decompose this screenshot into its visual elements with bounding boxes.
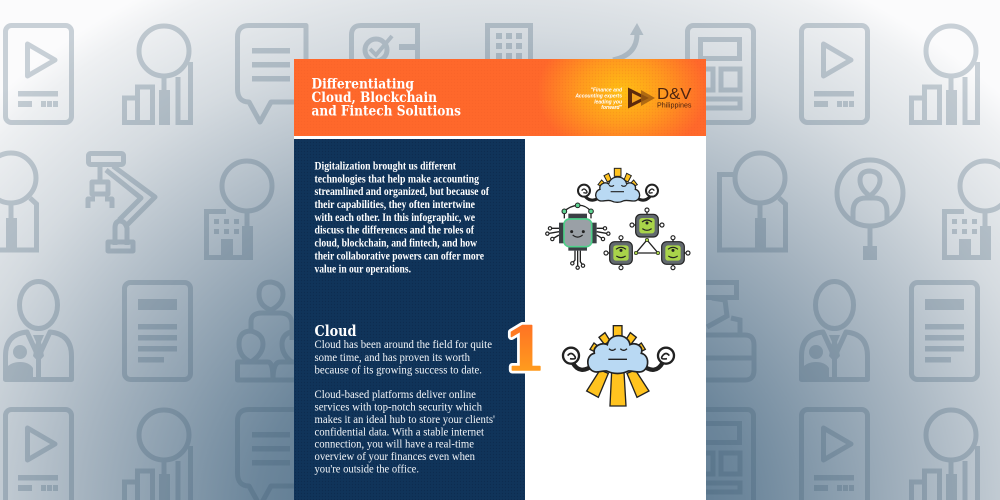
icon: group of people bbox=[238, 282, 296, 380]
tagline bbox=[574, 88, 623, 111]
logo wordmark: Philippines bbox=[657, 100, 692, 110]
heading: Cloud: Cloud bbox=[314, 323, 356, 340]
illustration: large meditating cloud bbox=[563, 326, 674, 406]
icon: play document bbox=[802, 410, 868, 500]
icon: speech bubble bbox=[238, 26, 306, 122]
hands bbox=[563, 348, 674, 364]
panel: orange header bbox=[294, 59, 706, 136]
white poster sheet bbox=[294, 59, 706, 500]
cloud description: because of its growing success to date. bbox=[314, 364, 482, 376]
blockchain node circles bbox=[604, 208, 690, 270]
logo mark bbox=[628, 88, 655, 108]
chip body bbox=[559, 214, 597, 251]
icon: document bbox=[124, 282, 190, 380]
icon: magnifier chart bbox=[912, 410, 978, 500]
cloud description: Cloud has been around the field for quite bbox=[314, 339, 492, 351]
cloud description: confidential data. With a stable internet bbox=[314, 426, 485, 438]
icon: magnifier chart bbox=[912, 26, 978, 125]
icon: check document bbox=[352, 26, 418, 62]
icon: office building bbox=[485, 23, 533, 60]
title: Cloud, Blockchain bbox=[312, 90, 437, 106]
icon: magnifier document left bbox=[0, 153, 36, 251]
icon: robot arm bbox=[88, 154, 155, 251]
icon: magnifier building bbox=[206, 161, 272, 260]
intro paragraph: discuss the differences and the roles of bbox=[314, 225, 474, 237]
small cloud body bbox=[596, 177, 640, 202]
cloud face bbox=[608, 349, 627, 359]
small cloud rays bbox=[598, 168, 637, 187]
icon: person magnifier bbox=[837, 160, 903, 260]
chip connector lines bbox=[547, 205, 608, 268]
illustration: meditating cloud with chip and blockchain bbox=[546, 168, 690, 270]
cloud description: Cloud-based platforms deliver online bbox=[314, 389, 476, 401]
cloud description: makes it an ideal hub to store your clients' bbox=[314, 414, 495, 426]
icon: businessperson bbox=[6, 282, 72, 382]
intro paragraph: streamlined and organized, but because of bbox=[314, 186, 489, 198]
icon: play document bbox=[802, 26, 868, 122]
blockchain block left bbox=[610, 242, 632, 264]
blockchain triangle nodes bbox=[634, 238, 660, 255]
icon: form document bbox=[688, 410, 754, 500]
icon: magnifier chart bbox=[124, 410, 190, 500]
intro paragraph: technologies that help make accounting bbox=[314, 173, 479, 185]
small cloud face bbox=[609, 185, 626, 192]
tagline: leading you bbox=[594, 100, 622, 106]
title bbox=[312, 76, 461, 120]
blockchain block right bbox=[662, 242, 684, 264]
blockchain links bbox=[606, 210, 688, 268]
icon: form document bbox=[688, 26, 754, 122]
small cloud hands bbox=[578, 185, 658, 197]
chip nodes bbox=[562, 203, 593, 214]
cloud description: services with top-notch security which bbox=[314, 402, 482, 414]
icon: growth arrow bbox=[613, 23, 644, 60]
icon: play document bbox=[6, 410, 72, 500]
intro paragraph bbox=[314, 160, 489, 275]
icon: businessperson bbox=[802, 282, 868, 382]
arms bbox=[573, 363, 663, 370]
number 1 badge: 1 bbox=[504, 315, 546, 385]
cloud description: connection, you will have a real-time bbox=[314, 439, 474, 451]
icon: magnifier building right bbox=[944, 161, 1000, 260]
icon: speech bubble bbox=[238, 410, 306, 500]
intro paragraph: with each other. In this infographic, we bbox=[314, 212, 475, 224]
tagline: "Finance and bbox=[590, 88, 623, 94]
rays bbox=[587, 326, 649, 406]
intro paragraph: Digitalization brought us different bbox=[314, 160, 456, 172]
title: and Fintech Solutions bbox=[312, 104, 461, 120]
cloud body bbox=[588, 336, 648, 373]
small cloud arms bbox=[585, 197, 650, 200]
blockchain block top bbox=[636, 214, 658, 237]
tagline: Accounting experts bbox=[574, 94, 622, 100]
number 1 badge: 1 bbox=[504, 315, 546, 385]
cloud description: you're outside the office. bbox=[314, 463, 419, 475]
intro paragraph: value in our operations. bbox=[314, 263, 411, 275]
intro paragraph: cloud, blockchain, and fintech, and how bbox=[314, 238, 478, 250]
icon: document bbox=[912, 282, 978, 380]
cloud description bbox=[314, 339, 495, 475]
logo wordmark: D&V bbox=[657, 86, 692, 103]
panel: navy text column bbox=[294, 139, 525, 500]
icon: play document bbox=[6, 26, 72, 122]
title: Differentiating bbox=[312, 76, 414, 92]
cloud description: some time, and has proven its worth bbox=[314, 352, 470, 364]
cloud description: overview of your finances even when bbox=[314, 451, 475, 463]
icon: magnifier document right bbox=[720, 153, 786, 251]
icon: magnifier chart bbox=[124, 26, 190, 125]
icon: stamp bbox=[700, 282, 754, 380]
intro paragraph: their collaborative powers can offer more bbox=[314, 250, 484, 262]
logo wordmark bbox=[657, 86, 692, 110]
intro paragraph: their capabilities, they often intertwine bbox=[314, 199, 475, 211]
tagline: forward" bbox=[601, 105, 623, 111]
